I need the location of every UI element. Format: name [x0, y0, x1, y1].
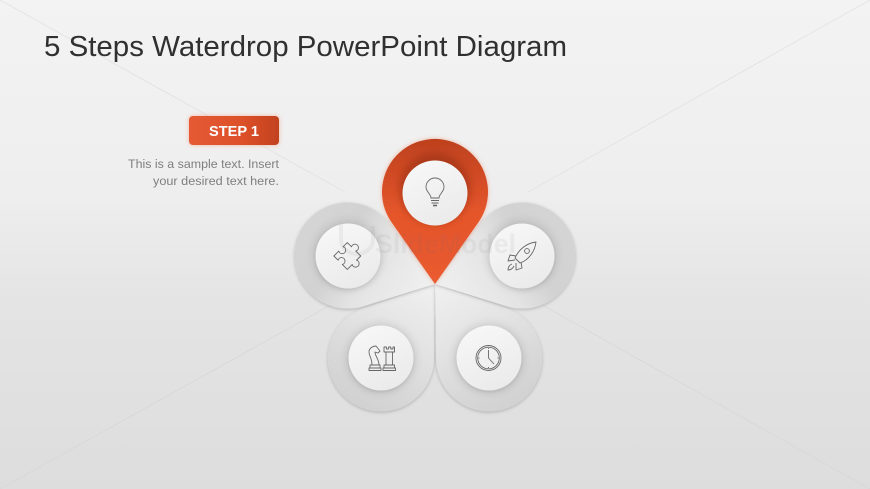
- watermark: [341, 224, 516, 259]
- icon: light bulb: [426, 178, 444, 206]
- pin: step 1 active drop: [382, 139, 488, 284]
- icon: rocket: [508, 242, 536, 270]
- icon: puzzle piece: [334, 239, 368, 273]
- step 1 label: [189, 116, 279, 145]
- inner circle: puzzle: [316, 224, 380, 288]
- step 1 description: This is a sample text. Insert: [128, 157, 280, 171]
- inner circle: chess: [348, 326, 414, 390]
- ring shadows: [311, 218, 559, 395]
- pin inner shadow: [399, 153, 471, 225]
- icon: chess pieces: [369, 346, 396, 370]
- inner circle: clock: [456, 326, 522, 390]
- step 1 description: [128, 157, 280, 188]
- title: 5 Steps Waterdrop PowerPoint Diagram: [44, 31, 567, 63]
- watermark: SlideModel: [375, 229, 516, 259]
- inner circle: bulb: [402, 160, 468, 226]
- drop: bottom right, clock: [435, 284, 542, 411]
- step 1 description: your desired text here.: [153, 174, 279, 188]
- drop: bottom left, chess: [328, 284, 435, 411]
- drop: right, rocket: [435, 203, 576, 309]
- icon: clock: [476, 346, 501, 370]
- step 1 label: STEP 1: [209, 123, 259, 140]
- inner circle: rocket: [490, 224, 554, 288]
- drop: left, puzzle: [294, 203, 435, 309]
